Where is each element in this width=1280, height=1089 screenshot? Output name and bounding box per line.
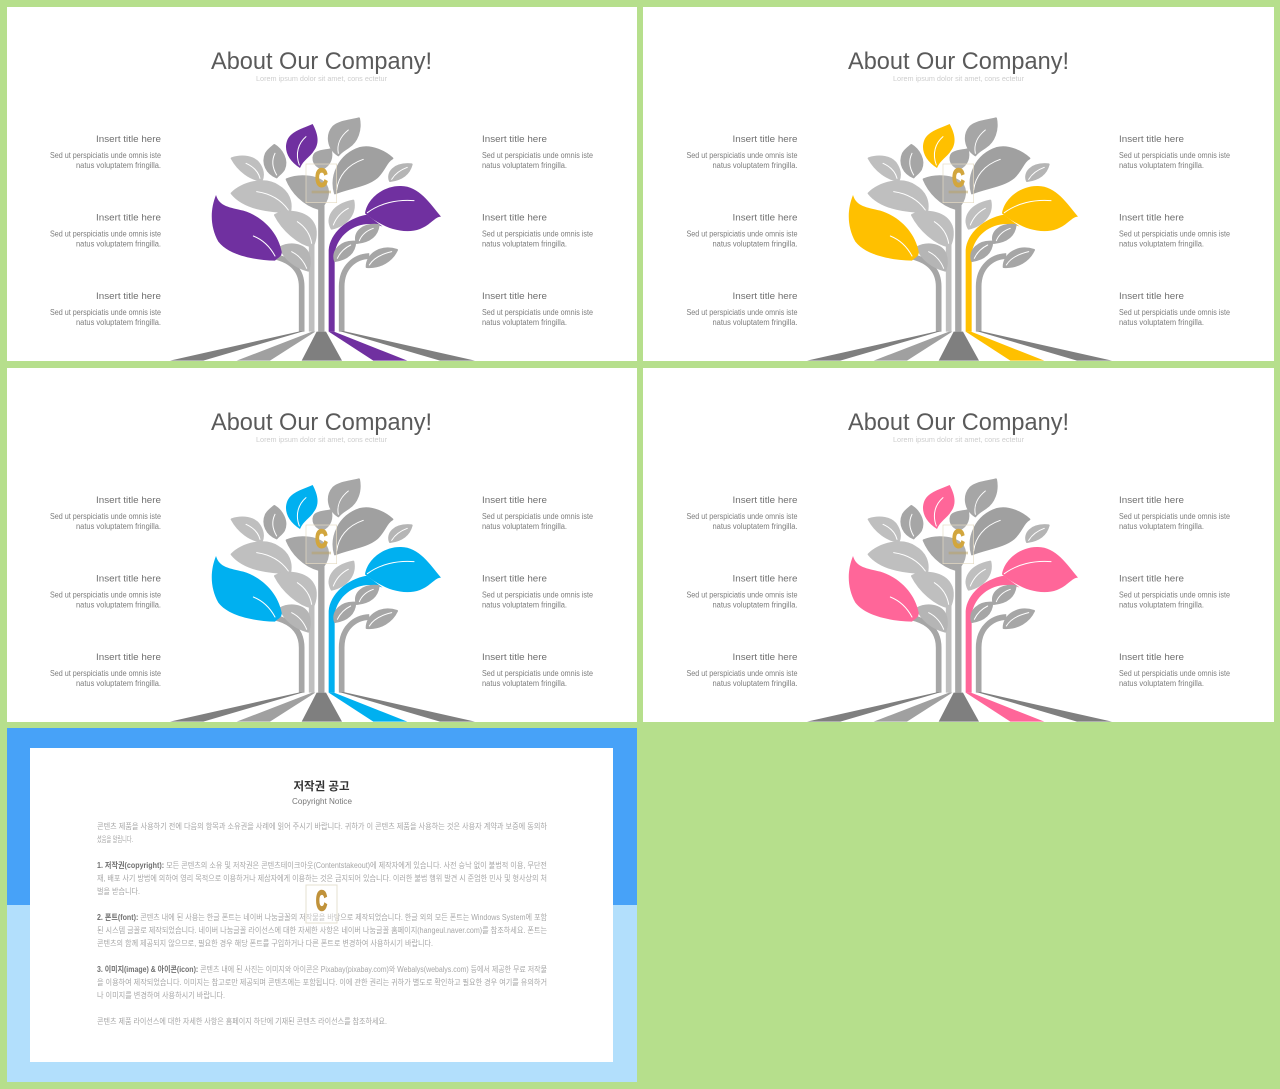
text block: left middle: Insert title here [732,212,798,224]
text block: left top [50,495,161,531]
text block: left middle: natus voluptatem fringilla. [76,600,161,610]
text block: copyright clause: 벌을 받습니다. [97,886,140,896]
text block: image and icon clause: 3. 이미지(image) & 아이콘(icon): 콘텐츠 내에 된 사진는 이미지와 아이콘은 Pixabay(pixabay.com)와 Webalys(webalys.com) 등에서 제공한 무료 저작물 [97,964,547,974]
tree illustration: purple [170,118,475,361]
tree illustration: pink [807,479,1112,722]
text block: font clause: 된 시스템 글꼴로 제작되었습니다. 네이버 나눔글꼴 라이선스에 대한 자세한 사항은 네이버 나눔글꼴 홈페이지(hangeul.naver.com)를 참조하세요. 폰트는 [97,925,547,935]
text block: left middle [50,212,161,248]
panel: blue tree slide [7,368,637,722]
subtitle: Lorem ipsum dolor sit amet, cons ectetur [893,435,1024,444]
text block: left middle: Insert title here [732,574,798,584]
text block: right middle: natus voluptatem fringilla. [1119,240,1204,248]
tree illustration: blue [170,479,475,722]
text block: left middle [686,212,798,248]
text block: right top: natus voluptatem fringilla. [482,522,567,531]
text block: right middle [482,574,593,610]
text block: left bottom [686,291,798,327]
text block: right bottom: Insert title here [482,291,547,302]
text block: left bottom: Insert title here [96,291,161,302]
text block: left bottom [50,291,161,327]
text block: right bottom: Insert title here [1119,652,1184,663]
subtitle: Lorem ipsum dolor sit amet, cons ectetur [256,435,387,444]
text block: right top [482,495,593,531]
title: About Our Company! [211,48,432,75]
text block: left middle: Sed ut perspiciatis unde omnis iste [686,230,798,238]
subtitle: Lorem ipsum dolor sit amet, cons ectetur [256,74,387,83]
text block: right middle: Insert title here [482,574,547,584]
title: About Our Company! [848,409,1069,436]
panel: purple tree slide [7,7,637,361]
text block: left middle: Insert title here [96,574,161,584]
text block: right top: natus voluptatem fringilla. [482,161,567,170]
text block: right bottom: natus voluptatem fringilla. [482,318,567,327]
text block: left top: natus voluptatem fringilla. [76,161,161,170]
text block: font clause: 2. 폰트(font): 콘텐츠 내에 된 사용는 한글 폰트는 네이버 나눔글꼴의 저작물을 바탕으로 제작되었습니다. 한글 외의 모든 폰트는 Windows System에 포함 [97,912,548,922]
text block: left middle: Sed ut perspiciatis unde omnis iste [50,590,161,600]
text block: right top: Insert title here [1119,134,1184,145]
text block: left bottom: Sed ut perspiciatis unde omnis iste [686,669,798,678]
text block: left bottom: Sed ut perspiciatis unde omnis iste [686,308,798,317]
text block: intro [97,821,548,844]
text block: right middle: Sed ut perspiciatis unde omnis iste [482,230,593,238]
text block: intro: 셨음을 알립니다. [97,834,133,844]
text block: left top: Insert title here [732,495,798,506]
text block: right top: Sed ut perspiciatis unde omnis iste [482,512,593,521]
text block: left middle: Sed ut perspiciatis unde omnis iste [50,230,161,238]
text block: left bottom: natus voluptatem fringilla. [712,318,798,327]
text block: left top [686,134,798,170]
text block: right bottom: Sed ut perspiciatis unde omnis iste [482,669,593,678]
text block: image and icon clause [97,964,547,1000]
text block: right bottom [1119,291,1230,327]
text block: right bottom: natus voluptatem fringilla. [1119,318,1204,327]
panel: copyright notice [7,728,637,1082]
text block: license note: 콘텐츠 제품 라이선스에 대한 자세한 사항은 홈페이지 하단에 기재된 콘텐츠 라이선스를 참조하세요. [97,1016,387,1026]
icon: watermark logo: C [316,885,327,916]
text block: right bottom: Insert title here [482,652,547,663]
text block: left top: Sed ut perspiciatis unde omnis iste [50,512,161,521]
text block: left middle [50,574,161,610]
text block: right top [1119,134,1230,170]
text block: left bottom: Insert title here [732,291,798,302]
text block: copyright clause [97,860,547,896]
text block: left top: Insert title here [96,495,161,506]
text block: left bottom: natus voluptatem fringilla. [76,679,161,688]
text block: right middle: natus voluptatem fringilla. [482,240,567,248]
text block: right bottom [1119,652,1230,688]
text block: right middle: natus voluptatem fringilla. [1119,600,1204,610]
panel: pink tree slide [643,368,1274,722]
text block: right top: Insert title here [482,134,547,145]
text block: left bottom: natus voluptatem fringilla. [76,318,161,327]
text block: left top: natus voluptatem fringilla. [712,522,798,531]
text block: right top: Insert title here [1119,495,1184,506]
text block: right bottom [482,291,593,327]
text block: right top: Sed ut perspiciatis unde omnis iste [482,151,593,160]
text block: left bottom: Sed ut perspiciatis unde omnis iste [50,669,161,678]
text block: left middle: natus voluptatem fringilla. [76,240,161,248]
text block: left top: natus voluptatem fringilla. [712,161,798,170]
subtitle: Lorem ipsum dolor sit amet, cons ectetur [893,74,1024,83]
text block: left top: Sed ut perspiciatis unde omnis iste [686,512,798,521]
text block: left bottom: Insert title here [96,652,161,663]
text block: left top [686,495,798,531]
text block: right top [482,134,593,170]
text block: right middle: Insert title here [482,212,547,224]
text block: left middle: Sed ut perspiciatis unde omnis iste [686,590,798,600]
text block: left middle [686,574,798,610]
text block: left top: Insert title here [732,134,798,145]
text block: left top: natus voluptatem fringilla. [76,522,161,531]
text block: right bottom: Sed ut perspiciatis unde omnis iste [482,308,593,317]
text block: right middle: Insert title here [1119,574,1184,584]
text block: copyright clause: 1. 저작권(copyright): 모든 콘텐츠의 소유 및 저작권은 콘텐츠테이크아웃(Contentstakeout)에 제작자에게 있습니다. 사전 승낙 없이 불법적 이용, 무단전 [97,860,547,870]
tree illustration: yellow [807,118,1112,361]
text block: right middle: Sed ut perspiciatis unde omnis iste [1119,230,1230,238]
text block: right bottom: natus voluptatem fringilla. [1119,679,1204,688]
icon: watermark logo [306,885,337,923]
text block: left top: Sed ut perspiciatis unde omnis iste [686,151,798,160]
title: About Our Company! [848,48,1069,75]
text block: right top [1119,495,1230,531]
text block: right top: Insert title here [482,495,547,506]
text block: font clause [97,912,548,948]
text block: left top [50,134,161,170]
text block: right bottom: natus voluptatem fringilla. [482,679,567,688]
text block: right middle: Sed ut perspiciatis unde omnis iste [482,590,593,600]
text block: left top: Insert title here [96,134,161,145]
panel: yellow tree slide [643,7,1274,361]
text block: right middle [1119,574,1230,610]
text block: left top: Sed ut perspiciatis unde omnis iste [50,151,161,160]
title: About Our Company! [211,409,432,436]
text block: left middle: Insert title here [96,212,161,224]
text block: right top: Sed ut perspiciatis unde omnis iste [1119,151,1230,160]
text block: right bottom: Sed ut perspiciatis unde omnis iste [1119,669,1230,678]
text block: left bottom: Sed ut perspiciatis unde omnis iste [50,308,161,317]
text block: left middle: natus voluptatem fringilla. [712,600,798,610]
text block: left bottom [686,652,798,688]
text block: intro: 콘텐츠 제품을 사용하기 전에 다음의 항목과 소유권을 사례에 읽어 주시기 바랍니다. 귀하가 이 콘텐츠 제품을 사용하는 것은 사용자 계약과 보증에 동의하 [97,821,548,831]
text block: right middle: Sed ut perspiciatis unde omnis iste [1119,590,1230,600]
text block: image and icon clause: 나 이미지를 변경하여 사용하시기 바랍니다. [97,990,225,1000]
text block: right middle: Insert title here [1119,212,1184,224]
heading: copyright notice: 저작권 공고 [293,779,350,793]
text block: right bottom [482,652,593,688]
text block: left bottom [50,652,161,688]
text block: left bottom: Insert title here [732,652,798,663]
text block: right middle [482,212,593,248]
text block: left middle: natus voluptatem fringilla. [712,240,798,248]
text block: font clause: 콘텐츠의 함께 제공되지 않으므로, 필요한 경우 해당 폰트를 구입하거나 다른 폰트로 변경하여 사용하시기 바랍니다. [97,938,433,948]
text block: image and icon clause: 을 이용하여 제작되었습니다. 이미지는 참고로만 제공되며 콘텐츠에는 포함됩니다. 이에 관한 권리는 귀하가 별도로 확인하고 필요한 경우 여기를 유의하거 [97,977,547,987]
text block: right top: natus voluptatem fringilla. [1119,522,1204,531]
text block: right middle: natus voluptatem fringilla. [482,600,567,610]
text block: right top: Sed ut perspiciatis unde omnis iste [1119,512,1230,521]
text block: right bottom: Sed ut perspiciatis unde omnis iste [1119,308,1230,317]
text block: right top: natus voluptatem fringilla. [1119,161,1204,170]
text block: copyright clause: 재, 배포 사기 방법에 의하여 영리 목적으로 이용하거나 제삼자에게 이용하는 것은 금지되어 있습니다. 이러한 불법 행위 발견 시 준엄한 민사 및 형사상의 처 [97,873,547,883]
subheading: Copyright Notice [292,797,353,806]
text block: right middle [1119,212,1230,248]
text block: right bottom: Insert title here [1119,291,1184,302]
text block: left bottom: natus voluptatem fringilla. [712,679,798,688]
